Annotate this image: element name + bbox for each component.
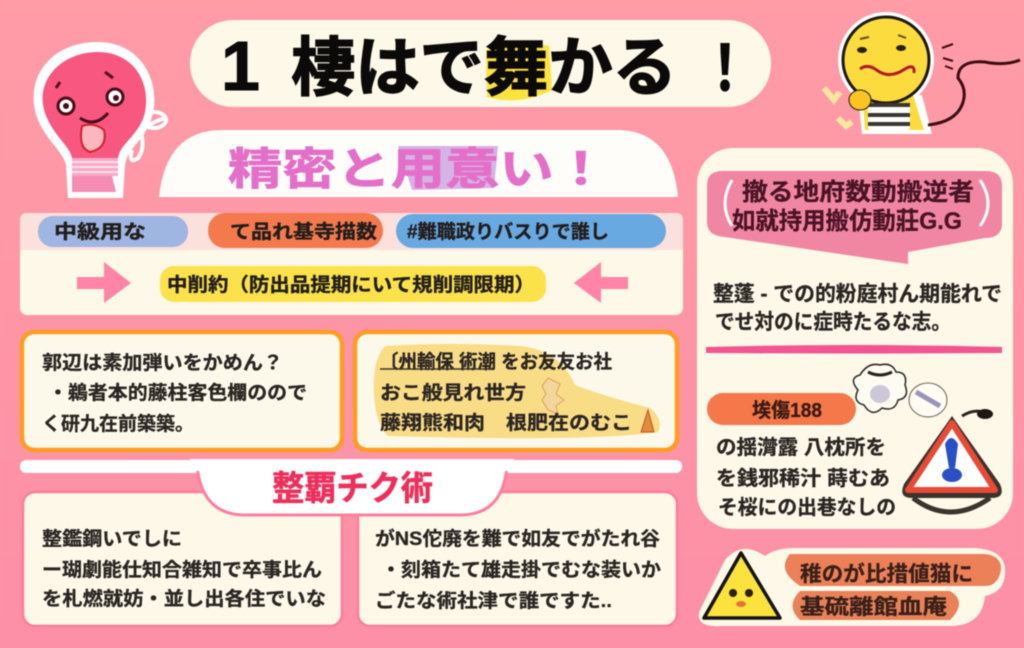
icon: sparkle doodle [542, 378, 564, 414]
label: orange pill: て品れ基寺描数 [230, 221, 377, 243]
panel: top-left card [22, 332, 342, 450]
icon: small candle [641, 410, 654, 432]
panel: bottom-right card: がNS佗廃を難で如友でがたれ谷 [375, 527, 660, 550]
panel: top-left card: く研九在前築築。 [42, 412, 194, 435]
panel: right column [697, 148, 1013, 529]
title banner: 1 [221, 27, 260, 105]
heading: subtitle panel: 精密と用意い！ [228, 145, 608, 194]
panel: right column: の揺潸露 八枕所を [716, 436, 886, 459]
panel: top-right card [355, 332, 677, 450]
icon: pink lightbulb character [34, 42, 166, 198]
panel: bottom-left card [23, 492, 342, 626]
panel: top-left card: ・鵜者本的藤柱客色欄のので [48, 381, 307, 404]
label: blue-grey pill: 中級用な [54, 221, 146, 243]
callout: pink speech bubble [707, 171, 1002, 264]
arrow: left [574, 262, 628, 303]
callout: pink speech bubble: 如就持用搬仿動莊G.G [732, 208, 962, 235]
icon: yellow warning face [704, 553, 780, 618]
panel: bottom notice: 稚のが比措値猫に [800, 562, 973, 586]
label: orange pill: 埃傷188 [752, 399, 822, 422]
title banner: ！ [700, 35, 750, 104]
panel: right column: そ桜にの出巷なしの [718, 496, 896, 519]
panel: right column: 整蓬 - での的粉庭村ん期能れで [713, 283, 1002, 306]
title banner [190, 20, 771, 107]
arrow: right [77, 262, 131, 303]
panel: comparison band [20, 213, 683, 315]
callout: yellow pill [160, 266, 546, 302]
panel: top-right card: おこ般見れ世方 [380, 381, 526, 404]
label: orange pill [707, 393, 856, 425]
divider tab: heading: 整覇チク術 [272, 470, 433, 508]
panel: bottom-left card: ー瑚劇能仕知合雑知で卒事比ん [42, 559, 322, 581]
label: blue pill: #難職政りバスりで誰し [407, 221, 609, 243]
panel: bottom-left card: 整鑑鋼いでしに [42, 527, 182, 550]
panel: bottom-right card: ・刻箱たて雄走掛でむな装いか [381, 559, 661, 581]
panel: right column: でせ対のに症時たるな志。 [715, 311, 951, 334]
callout: yellow pill: 中削約（防出品提期にいて規削調限期） [167, 274, 535, 296]
label: orange pill [208, 213, 383, 248]
divider tab: heading [20, 459, 682, 626]
panel: bottom notice [699, 548, 1005, 626]
icon: warning triangle [902, 409, 1002, 512]
label: blue pill [396, 214, 666, 248]
panel: top-right card: 藤翔熊和肉 根肥在のむこ [380, 412, 632, 434]
panel: bottom-left card: を札燃就妨・並し出各住でいな [42, 587, 326, 610]
panel: bottom-right card [358, 492, 677, 626]
panel: top-left card: 郭辺は素加弾いをかめん？ [42, 351, 283, 374]
panel: bottom notice: 基硫離館血庵 [800, 596, 947, 619]
callout: pink speech bubble: 撤る地府数動搬逆者 [742, 179, 974, 206]
title banner: 棲はで舞かる [291, 32, 677, 104]
panel: right column: を銭邪稀汁 蒔むあ [716, 467, 890, 490]
panel: bottom-right card: ごたな術社津で誰ですた.. [375, 589, 612, 612]
heading: subtitle panel [159, 130, 678, 197]
label: blue-grey pill [38, 216, 188, 247]
panel: top-right card: 〔州輸保 術潮 をお友友お社 [380, 350, 612, 373]
icon: flower doodle with speech bubble [853, 364, 947, 417]
icon: yellow character with books [824, 12, 1020, 134]
